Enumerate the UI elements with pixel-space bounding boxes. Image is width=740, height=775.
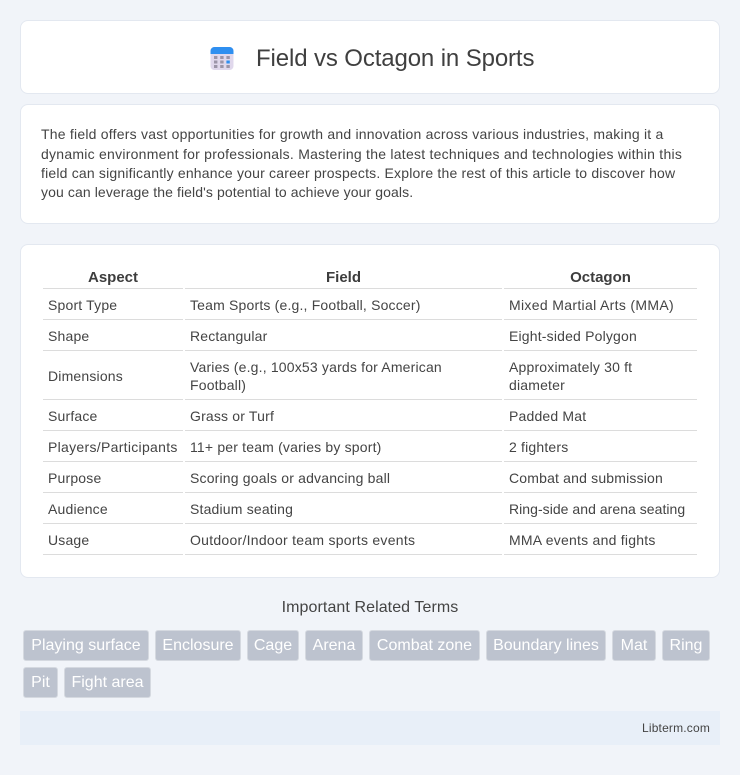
comparison table: Mixed Martial Arts (MMA): [509, 297, 674, 313]
comparison table: Dimensions: [48, 368, 123, 384]
table header: Aspect: [88, 269, 138, 286]
comparison table: Audience: [48, 501, 108, 517]
related term tags: Mat: [621, 637, 647, 654]
comparison table: Rectangular: [190, 328, 267, 344]
comparison table: Team Sports (e.g., Football, Soccer): [190, 297, 421, 313]
related term tags: Pit: [31, 674, 50, 691]
related term tags: Enclosure: [162, 637, 234, 654]
intro text: you can leverage the field's potential to achieve your goals.: [41, 184, 413, 200]
comparison table: Varies (e.g., 100x53 yards for American: [190, 359, 442, 375]
table header: [43, 269, 697, 289]
comparison table: 11+ per team (varies by sport): [190, 439, 382, 455]
table header: Octagon: [570, 269, 631, 286]
title: Field vs Octagon in Sports: [256, 45, 534, 72]
intro text: [41, 126, 682, 200]
comparison table: Combat and submission: [509, 470, 663, 486]
intro paragraph card: [20, 104, 720, 224]
related term tags: Boundary lines: [493, 637, 599, 654]
comparison table: 2 fighters: [509, 439, 568, 455]
comparison table: Approximately 30 ft: [509, 359, 632, 375]
related term tags: Cage: [254, 637, 292, 654]
comparison table: Grass or Turf: [190, 408, 274, 424]
comparison table: Players/Participants: [48, 439, 178, 455]
comparison table: Purpose: [48, 470, 101, 486]
related term tags: Combat zone: [377, 637, 472, 654]
comparison table: Football): [190, 377, 246, 393]
related term tags: Fight area: [71, 674, 144, 691]
comparison table: Surface: [48, 408, 98, 424]
comparison table: MMA events and fights: [509, 532, 656, 548]
related term tags: Arena: [313, 637, 355, 654]
footer bar: [20, 711, 720, 745]
comparison table: Outdoor/Indoor team sports events: [190, 532, 415, 548]
related term tags: Playing surface: [31, 637, 141, 654]
related term tags: Ring: [670, 637, 702, 654]
comparison table: Usage: [48, 532, 89, 548]
table header: Field: [326, 269, 361, 286]
comparison table: Shape: [48, 328, 89, 344]
comparison table: Padded Mat: [509, 408, 586, 424]
icon: calendar: [210, 47, 234, 70]
comparison table: diameter: [509, 377, 565, 393]
comparison table: Sport Type: [48, 297, 117, 313]
intro text: field can significantly enhance your career prospects. Explore the rest of this article to discover how: [41, 165, 675, 181]
header card: [20, 20, 720, 94]
comparison table: Ring-side and arena seating: [509, 501, 685, 517]
comparison table: Scoring goals or advancing ball: [190, 470, 390, 486]
intro text: The field offers vast opportunities for growth and innovation across various industries, making it a: [41, 126, 664, 142]
comparison table card: [20, 244, 720, 578]
comparison table: Stadium seating: [190, 501, 293, 517]
footer credit: Libterm.com: [642, 721, 710, 735]
related terms heading: Important Related Terms: [282, 599, 458, 616]
intro text: dynamic environment for professionals. Mastering the latest techniques and technologies within this: [41, 146, 682, 162]
comparison table: Eight-sided Polygon: [509, 328, 637, 344]
related term tags: [23, 630, 710, 698]
